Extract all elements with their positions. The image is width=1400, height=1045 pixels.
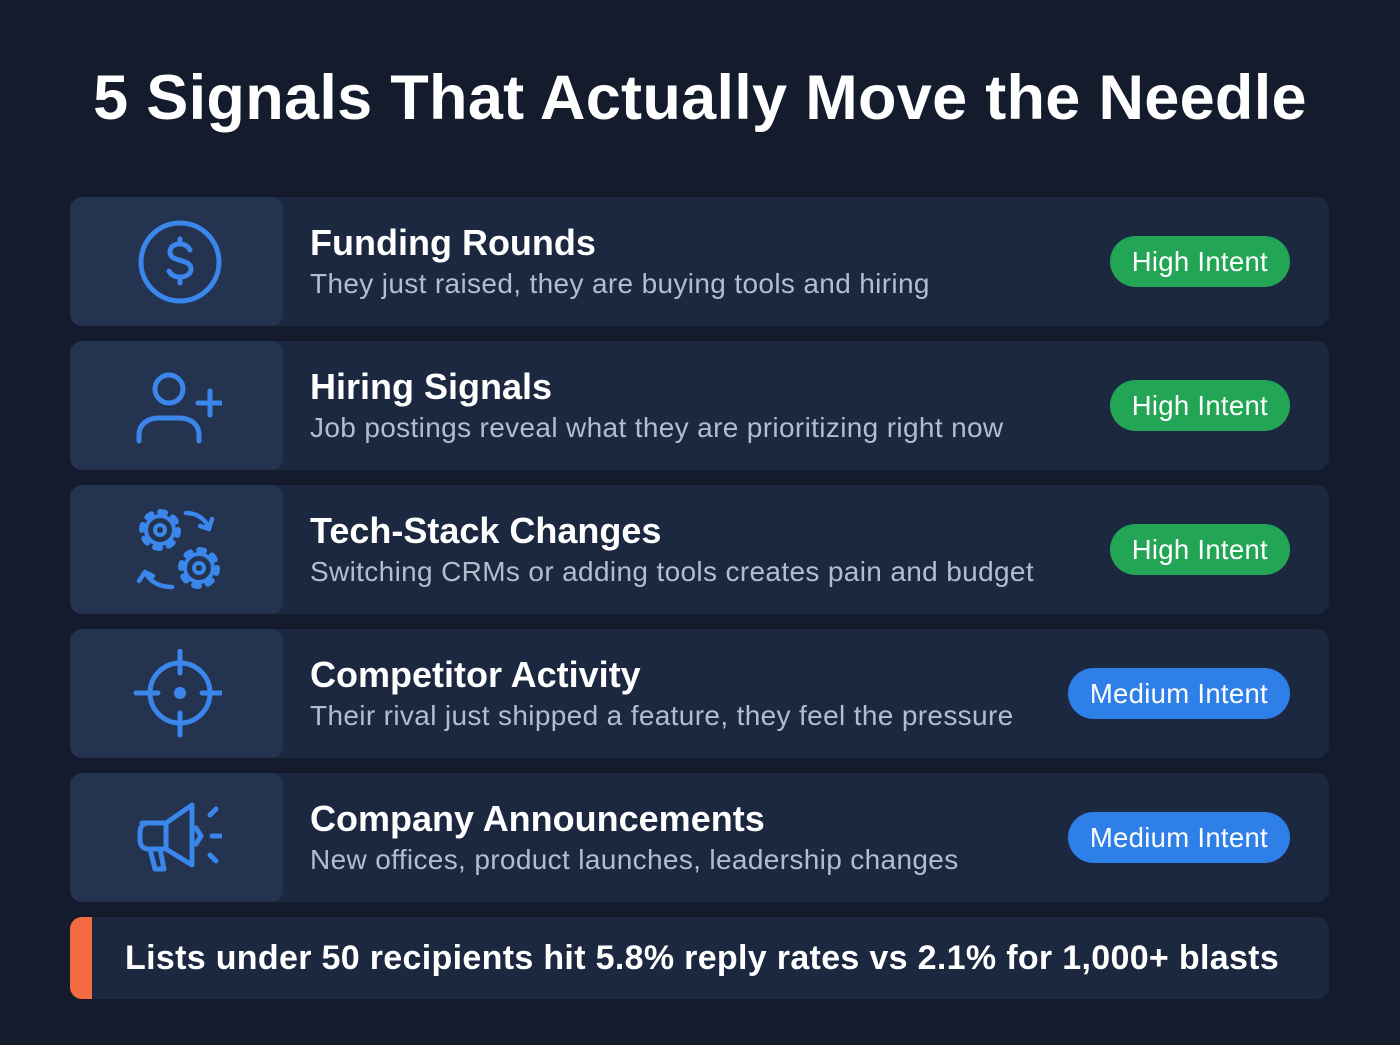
stat text: Lists under 50 recipients hit 5.8% reply rates vs 2.1% for 1,000+ blasts [125, 939, 1279, 977]
badge [1068, 668, 1290, 719]
description: Switching CRMs or adding tools creates pain and budget [310, 556, 1034, 587]
panel: competitor activity [70, 629, 1329, 758]
panel: funding rounds [70, 197, 1329, 326]
icon: target [70, 629, 283, 758]
callout: stat bar [70, 917, 1329, 999]
badge [1110, 524, 1290, 575]
description: They just raised, they are buying tools and hiring [310, 268, 930, 299]
panel: hiring signals [70, 341, 1329, 470]
heading: Competitor Activity [310, 654, 641, 695]
accent stripe [70, 917, 92, 999]
icon: add user [70, 341, 283, 470]
icon: megaphone [70, 773, 283, 902]
badge [1110, 380, 1290, 431]
heading: Company Announcements [310, 798, 765, 839]
description: Their rival just shipped a feature, they feel the pressure [310, 700, 1014, 731]
icon: dollar [70, 197, 283, 326]
icon: gears [70, 485, 283, 614]
badge: Medium Intent [1090, 822, 1268, 853]
heading: Hiring Signals [310, 366, 552, 407]
badge: Medium Intent [1090, 678, 1268, 709]
badge: High Intent [1132, 390, 1268, 421]
description: Job postings reveal what they are prioritizing right now [310, 412, 1004, 443]
badge: High Intent [1132, 246, 1268, 277]
panel: tech-stack changes [70, 485, 1329, 614]
description: New offices, product launches, leadership changes [310, 844, 959, 875]
panel: company announcements [70, 773, 1329, 902]
heading: Tech-Stack Changes [310, 510, 661, 551]
badge [1110, 236, 1290, 287]
title: 5 Signals That Actually Move the Needle [93, 63, 1307, 133]
badge [1068, 812, 1290, 863]
badge: High Intent [1132, 534, 1268, 565]
heading: Funding Rounds [310, 222, 596, 263]
